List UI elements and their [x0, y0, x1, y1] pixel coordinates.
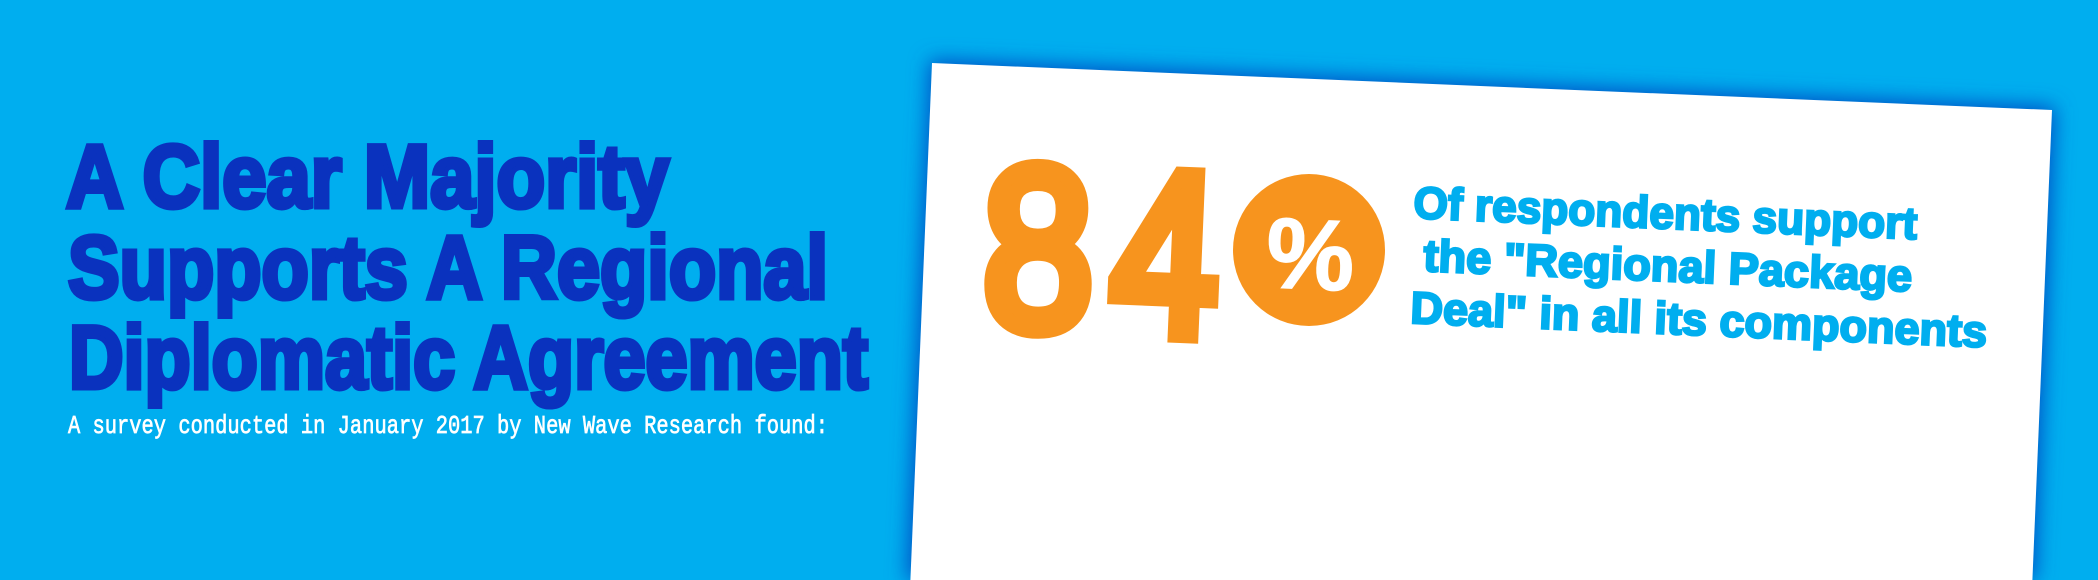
panel: white tilted sheet	[907, 60, 2055, 580]
digit 4: 4	[1107, 123, 1224, 384]
subtitle: A survey conducted in January 2017 by New Wave Research found:	[68, 411, 828, 441]
statistic description: the "Regional Package	[1423, 230, 1913, 301]
heading: Diplomatic Agreement	[69, 307, 868, 407]
percent badge: %	[1264, 197, 1357, 313]
statistic description	[1410, 177, 1988, 357]
statistic description: Of respondents support	[1413, 177, 1918, 249]
heading: A Clear Majority	[66, 126, 669, 226]
heading: Supports A Regional	[68, 217, 828, 317]
percent badge	[1233, 174, 1385, 326]
statistic: 84 percent	[983, 121, 1385, 384]
heading	[66, 126, 868, 407]
digit 8: 8	[983, 121, 1093, 377]
statistic description: Deal" in all its components	[1410, 282, 1988, 357]
